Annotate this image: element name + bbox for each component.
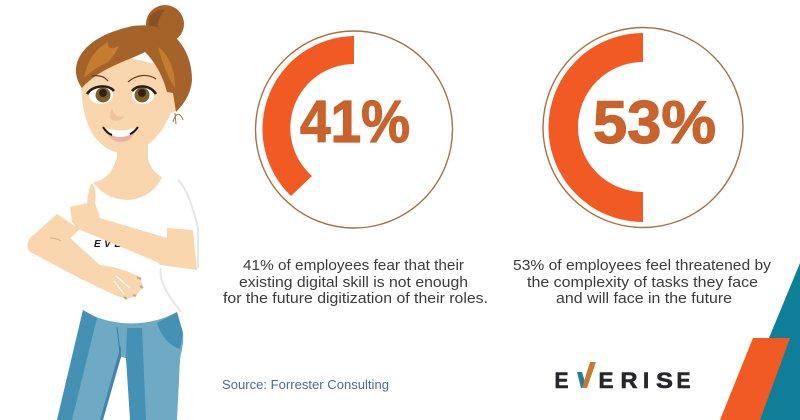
gauge outline [256, 31, 452, 228]
neck [93, 140, 162, 200]
text block: 53% description: 53% of employees feel threatened by [513, 258, 772, 274]
logo: Everise: E [598, 368, 614, 393]
corner decoration [720, 263, 800, 420]
ear [168, 93, 183, 124]
right eye [128, 75, 156, 104]
logo: Everise: E [554, 368, 568, 393]
text block: 53% description [513, 258, 772, 307]
logo check mark [577, 362, 596, 388]
nose [110, 108, 124, 121]
source note: Source: Forrester Consulting [222, 377, 389, 392]
logo: Everise: R [620, 368, 638, 393]
orange shape [720, 338, 790, 420]
hair [76, 25, 192, 112]
gauge arc 41% [262, 36, 354, 196]
text block: 41% description: existing digital skill is not enough [239, 275, 468, 291]
panel: 41% gauge [256, 31, 452, 228]
value 53%: 53% [593, 89, 716, 156]
arm across waist [27, 214, 143, 299]
face [81, 50, 178, 153]
logo: Everise [554, 362, 690, 393]
panel: 53% gauge [543, 28, 743, 228]
logo: Everise: E [676, 368, 690, 393]
jeans [57, 310, 183, 420]
text block: 41% description [223, 258, 488, 307]
left eye [87, 76, 114, 104]
text block: 53% description: the complexity of tasks they face [527, 275, 758, 291]
gauge outline [543, 28, 743, 228]
logo: Everise: S [656, 368, 673, 393]
logo: Everise: I [643, 368, 649, 393]
shirt logo: EVE [94, 239, 125, 250]
gauge arc 53% [549, 33, 643, 222]
value 41%: 41% [300, 89, 410, 155]
illustration: woman giving thumbs up [27, 5, 198, 420]
text block: 41% description: for the future digitization of their roles. [223, 291, 488, 307]
arm with thumbs up [70, 183, 197, 270]
smile [103, 127, 138, 142]
hair bun [146, 5, 184, 43]
shirt shadow [161, 180, 198, 312]
text block: 41% description: 41% of employees fear that their [243, 258, 464, 274]
text block: 53% description: and will face in the future [556, 291, 732, 307]
teal shape [735, 263, 800, 420]
